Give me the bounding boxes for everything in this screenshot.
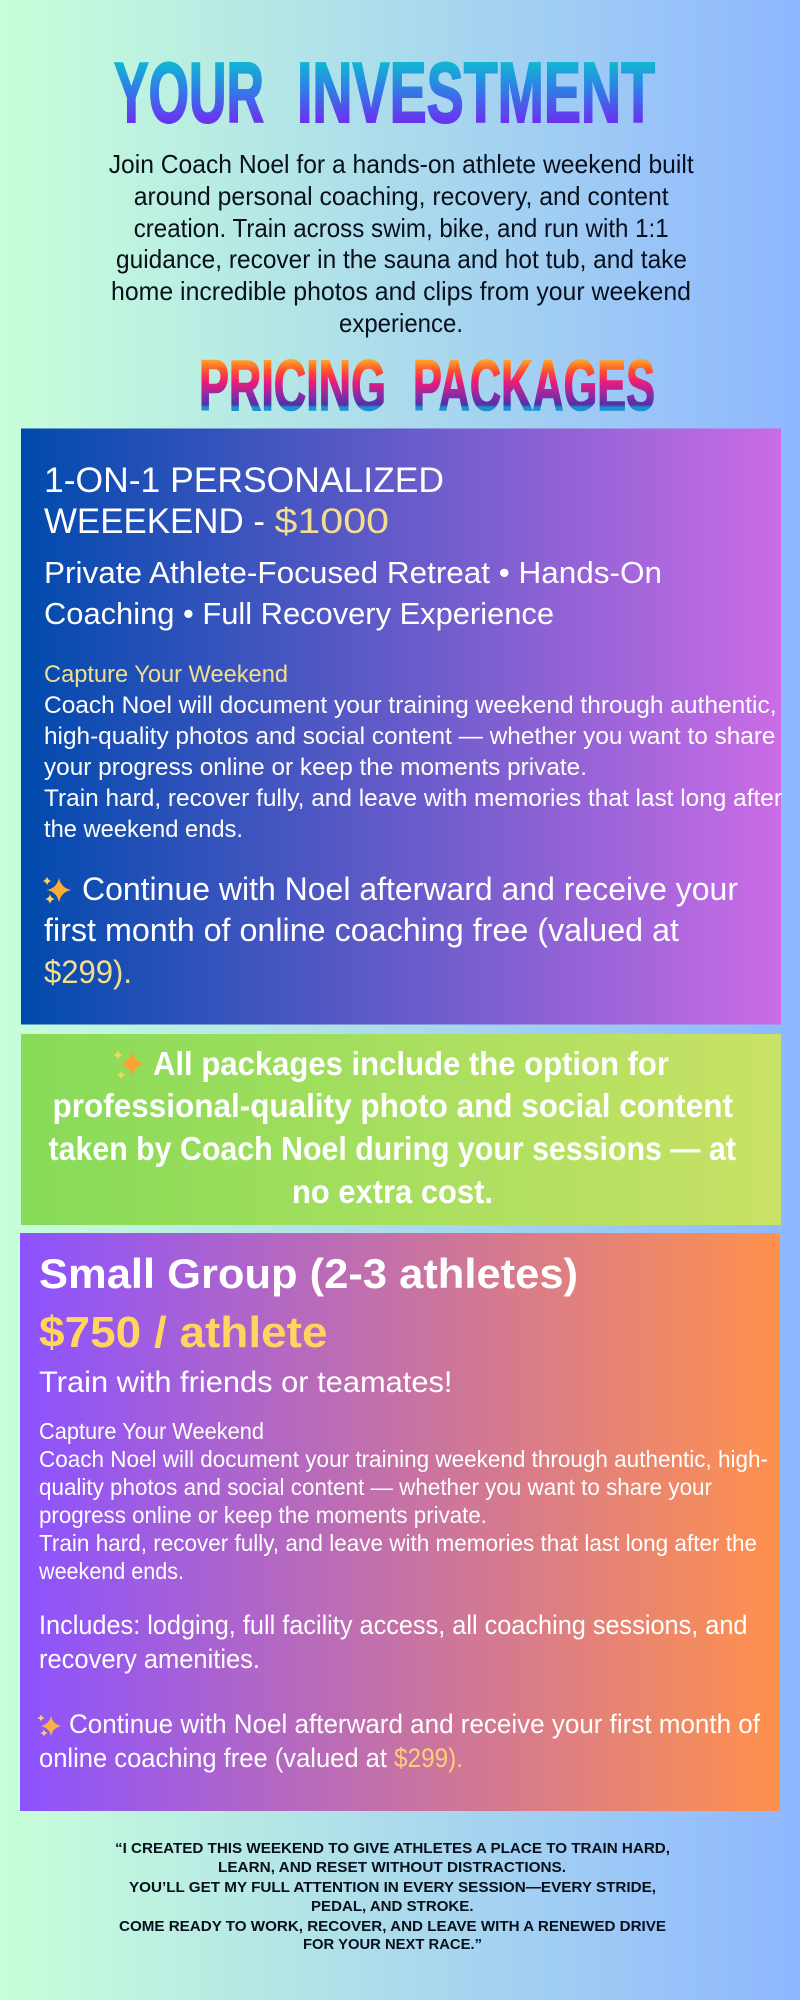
intro text block: creation. Train across swim, bike, and run with 1:1: [134, 213, 669, 243]
intro text block: guidance, recover in the sauna and hot tub, and take: [116, 244, 687, 274]
intro text block: around personal coaching, recovery, and content: [134, 181, 669, 211]
quote from coach: LEARN, AND RESET WITHOUT DISTRACTIONS.: [218, 1859, 566, 1876]
capture your weekend text: quality photos and social content — whether you want to share your: [39, 1474, 712, 1500]
package subtitle: Train with friends or teamates!: [39, 1366, 452, 1399]
package title and price: 1-ON-1 PERSONALIZED: [44, 461, 444, 500]
title: your investment: [114, 46, 655, 141]
capture your weekend text: Capture Your Weekend: [44, 661, 288, 688]
icon: sparkles: [37, 1714, 62, 1737]
capture your weekend text: Train hard, recover fully, and leave with memories that last long after: [44, 785, 782, 812]
quote from coach: YOU’LL GET MY FULL ATTENTION IN EVERY SESSION—EVERY STRIDE,: [129, 1879, 656, 1896]
coaching offer text: $299).: [44, 954, 132, 990]
package title: Small Group (2-3 athletes): [39, 1250, 578, 1297]
package title and price: $1000: [274, 502, 389, 541]
capture your weekend text: progress online or keep the moments private.: [39, 1502, 487, 1528]
capture your weekend text: the weekend ends.: [44, 816, 243, 843]
callout text: All packages include the option for: [153, 1045, 669, 1082]
package subtitle: [44, 555, 662, 631]
package subtitle: Private Athlete-Focused Retreat • Hands-On: [44, 555, 662, 590]
intro text block: experience.: [339, 308, 463, 338]
icon: sparkles: [42, 876, 72, 904]
coaching offer text: Continue with Noel afterward and receive your: [82, 871, 738, 907]
icon: sparkles: [113, 1050, 145, 1080]
includes text: recovery amenities.: [39, 1644, 260, 1674]
capture your weekend text: your progress online or keep the moments private.: [44, 754, 587, 781]
includes text: Includes: lodging, full facility access, all coaching sessions, and: [39, 1610, 748, 1640]
package title and price: [44, 461, 444, 541]
callout text: [48, 1045, 736, 1210]
coaching offer text: online coaching free (valued at: [39, 1743, 387, 1773]
capture your weekend text: [38, 1418, 768, 1584]
panel: all packages callout: [21, 1034, 781, 1225]
panel: small group: [20, 1233, 780, 1811]
quote from coach: [115, 1840, 670, 1953]
callout text: taken by Coach Noel during your sessions — at: [48, 1130, 736, 1167]
callout text: no extra cost.: [292, 1173, 493, 1210]
includes text: [39, 1610, 748, 1674]
heading: pricing packages: [199, 347, 655, 426]
capture your weekend text: [44, 661, 782, 843]
package subtitle: Coaching • Full Recovery Experience: [44, 596, 554, 631]
package price: $750 / athlete: [39, 1308, 328, 1357]
coaching offer text: $299).: [394, 1743, 463, 1773]
quote from coach: FOR YOUR NEXT RACE.”: [303, 1936, 482, 1953]
title: your investment: YOUR: [114, 46, 264, 141]
quote from coach: PEDAL, AND STROKE.: [311, 1898, 474, 1915]
capture your weekend text: Coach Noel will document your training weekend through authentic,: [44, 692, 776, 719]
capture your weekend text: Coach Noel will document your training weekend through authentic, high-: [39, 1446, 768, 1472]
coaching offer text: [39, 1709, 760, 1773]
capture your weekend text: weekend ends.: [38, 1558, 184, 1584]
capture your weekend text: Train hard, recover fully, and leave with memories that last long after the: [39, 1530, 757, 1556]
capture your weekend text: Capture Your Weekend: [39, 1418, 264, 1444]
intro text block: Join Coach Noel for a hands-on athlete weekend built: [109, 149, 694, 179]
coaching offer text: [44, 871, 738, 990]
quote from coach: COME READY TO WORK, RECOVER, AND LEAVE WITH A RENEWED DRIVE: [119, 1918, 666, 1935]
heading: pricing packages: PACKAGES: [413, 347, 655, 426]
package title and price: WEEEKEND -: [44, 502, 265, 541]
capture your weekend text: high-quality photos and social content — whether you want to share: [44, 723, 776, 750]
panel: 1-on-1 weekend: [21, 428, 782, 1024]
callout text: professional-quality photo and social content: [52, 1087, 733, 1124]
coaching offer text: first month of online coaching free (valued at: [44, 912, 679, 948]
quote from coach: “I CREATED THIS WEEKEND TO GIVE ATHLETES A PLACE TO TRAIN HARD,: [115, 1840, 670, 1857]
coaching offer text: Continue with Noel afterward and receive your first month of: [69, 1709, 760, 1739]
intro text block: home incredible photos and clips from your weekend: [111, 276, 691, 306]
heading: pricing packages: PRICING: [199, 347, 386, 426]
intro text block: [109, 149, 694, 338]
